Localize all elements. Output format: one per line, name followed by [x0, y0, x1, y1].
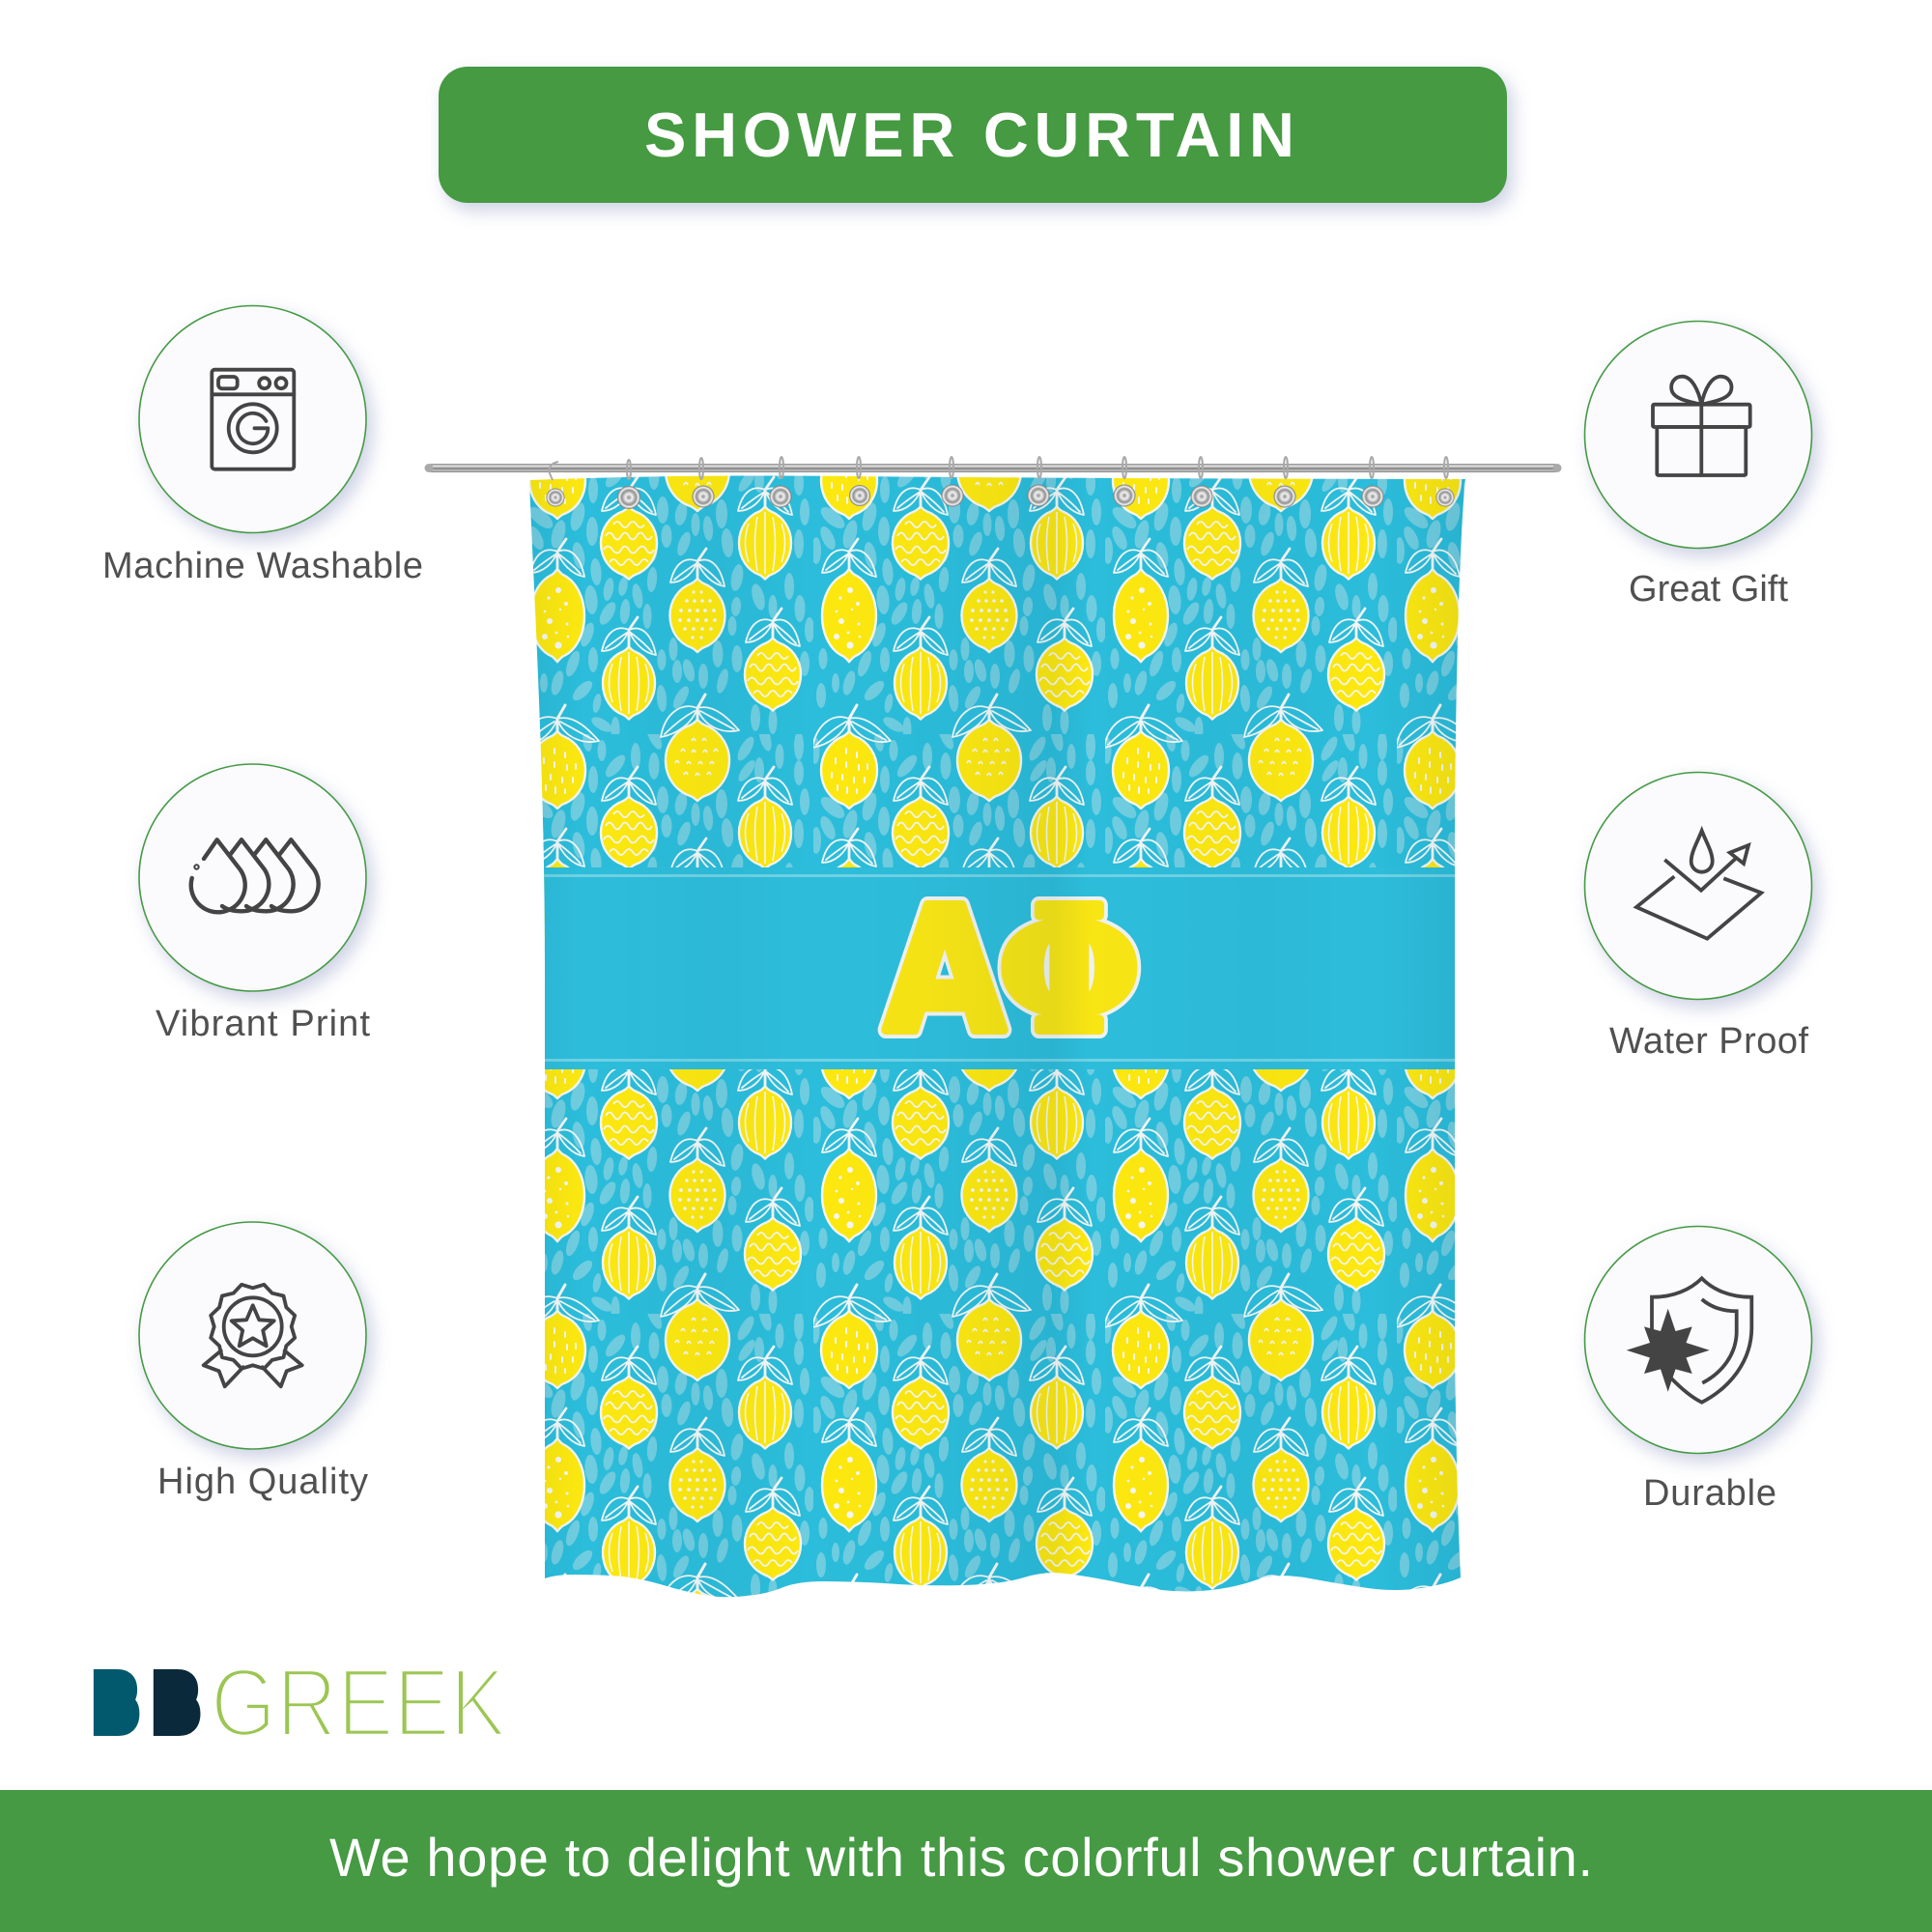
greek letters alpha phi: Α	[885, 871, 1005, 1070]
footer tagline: We hope to delight with this colorful shower curtain.	[329, 1827, 1593, 1888]
central band	[522, 867, 1473, 1069]
label: Machine Washable	[102, 546, 423, 586]
logo mark BB	[96, 1662, 197, 1745]
feature: machine washable	[102, 305, 423, 586]
label: Great Gift	[1629, 569, 1788, 610]
lemon pattern fabric	[522, 469, 1473, 1608]
icon: washing machine	[212, 370, 294, 469]
icon: gift box	[1653, 377, 1750, 475]
shower curtain	[522, 469, 1473, 1608]
title banner	[439, 67, 1507, 203]
feature: vibrant print	[139, 764, 370, 1044]
icon: award badge	[204, 1285, 302, 1386]
icon: water proof sheet	[1636, 831, 1761, 939]
label: Water Proof	[1609, 1021, 1808, 1062]
greek letters alpha phi: Φ	[999, 869, 1140, 1070]
greek letters alpha phi: Φ	[999, 869, 1140, 1070]
curtain grommets	[547, 485, 1455, 509]
feature: durable	[1584, 1227, 1812, 1514]
curtain rod	[425, 464, 1561, 472]
feature: water proof	[1584, 773, 1812, 1062]
feature: high quality	[139, 1222, 368, 1502]
label: High Quality	[157, 1462, 368, 1502]
title: SHOWER CURTAIN	[644, 99, 1294, 170]
icon: shield with impact star	[1627, 1278, 1751, 1403]
logo mark BB: B	[96, 1662, 136, 1745]
icon: ink drops	[191, 839, 319, 912]
label: Vibrant Print	[156, 1004, 370, 1044]
fold shading	[522, 469, 1473, 1608]
logo word GREEK: GREEK	[211, 1649, 506, 1757]
logo mark BB: B	[156, 1662, 197, 1745]
greek letters alpha phi	[877, 896, 1142, 1038]
feature: great gift	[1584, 321, 1812, 610]
greek letters alpha phi: Α	[885, 871, 1005, 1070]
footer bar	[0, 1790, 1932, 1932]
curtain hooks	[550, 457, 1448, 480]
label: Durable	[1643, 1473, 1776, 1514]
brand logo	[96, 1649, 506, 1757]
